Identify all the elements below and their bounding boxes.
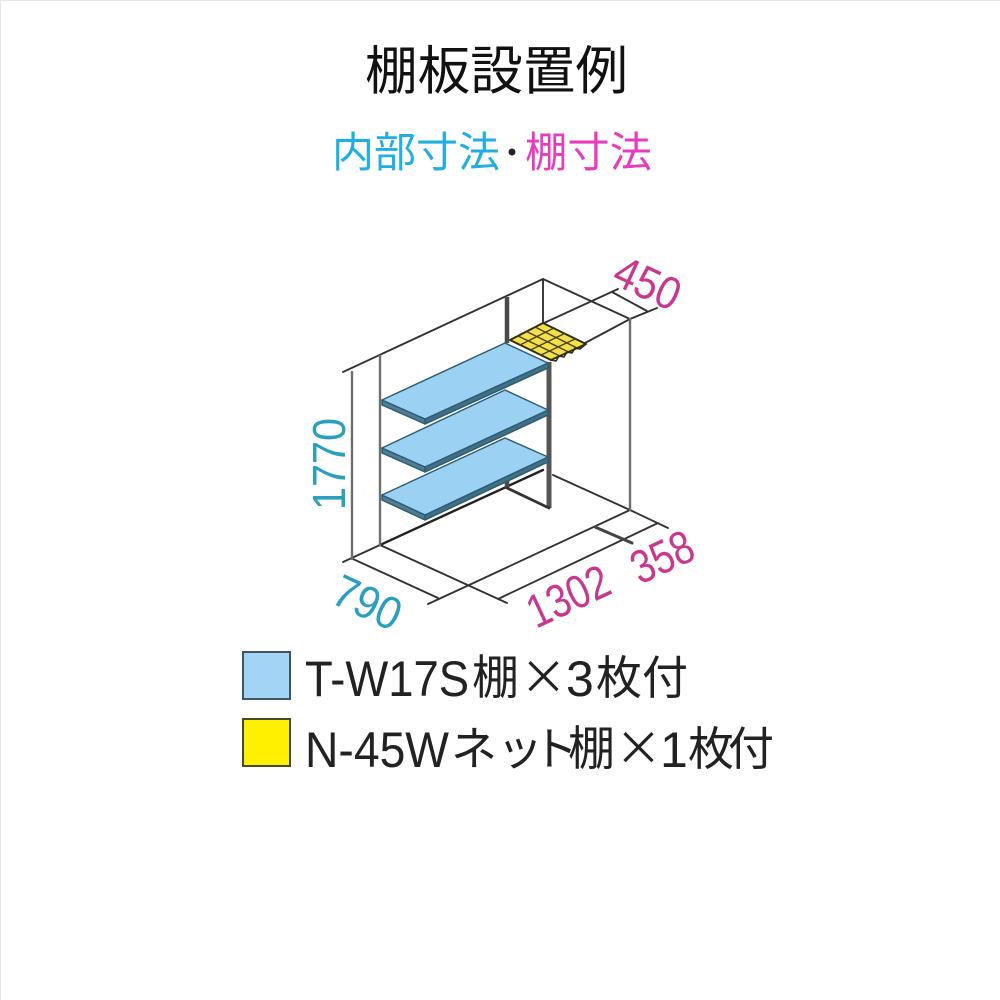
blue shelf 2 [382,390,548,472]
front post and brace [546,362,552,508]
legend: N-45W net shelf: ト [532,713,578,779]
legend: N-45W net shelf: 1 [660,722,688,778]
legend: N-45W net shelf [243,710,774,779]
legend: N-45W net shelf: 付 [728,713,774,779]
dimension 358: 358 [622,519,702,594]
legend: N-45W net shelf: ネ [451,713,497,779]
blue shelf 3 [382,438,548,520]
net shelf [510,323,586,361]
title: 棚板設置例 [365,42,628,101]
dimension 790: 790 [325,564,410,641]
legend: N-45W net shelf: 枚 [688,713,734,779]
storage frame lines [343,279,668,604]
legend: T-W17S shelf [243,639,688,708]
blue shelf 1 [382,343,548,424]
legend: T-W17S shelf: 枚 [596,642,642,708]
dimension 1302: 1302 [518,554,618,638]
legend: T-W17S shelf: 付 [642,642,688,708]
legend: T-W17S shelf: 3 [566,651,594,707]
subtitle: interior and shelf dimensions: 内部寸法 [332,129,500,176]
legend: N-45W net shelf: N-45W [305,722,450,778]
dimension 1770: 1770 [303,418,355,510]
rear post [505,297,509,488]
shelf diagram [343,279,668,604]
dimension 450: 450 [606,245,689,321]
legend: T-W17S shelf: T-W17S [305,651,469,707]
legend: N-45W net shelf: 棚 [568,710,615,779]
legend: N-45W net shelf: ッ [497,713,543,779]
subtitle: interior and shelf dimensions: 棚寸法 [525,129,652,176]
legend: N-45W net shelf: × [615,710,662,779]
legend: T-W17S shelf: 棚 [472,639,519,708]
legend: T-W17S shelf: × [520,639,567,708]
subtitle: interior and shelf dimensions [332,129,652,176]
